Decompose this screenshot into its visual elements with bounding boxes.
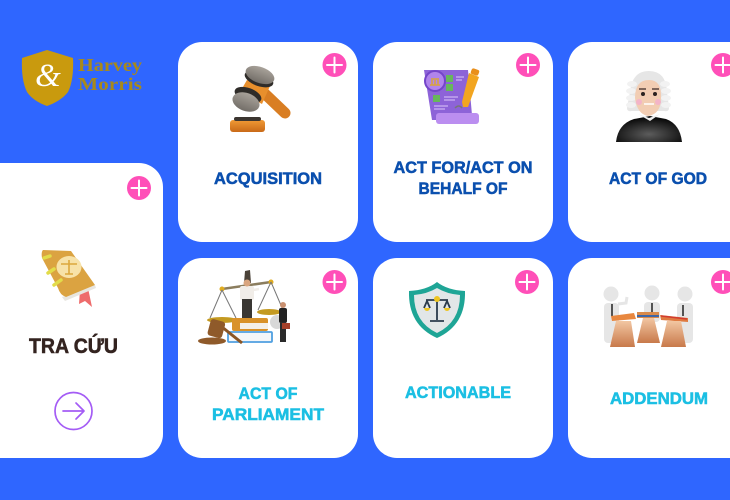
label: actionable: ACTIONABLE: [405, 384, 511, 402]
panel: act of parliament: [178, 258, 358, 458]
panel: addendum: [568, 258, 730, 458]
icon: plus button: [516, 53, 540, 77]
panel: acquisition: [178, 42, 358, 242]
icon: plus button: [515, 270, 539, 294]
logo wordmark: Morris: [78, 74, 142, 94]
label: addendum: ADDENDUM: [610, 390, 708, 408]
panel: act for/act on behalf of: [373, 42, 553, 242]
icon: shield with scales: [409, 282, 465, 338]
label: act of god: ACT OF GOD: [609, 170, 707, 188]
icon: scales, books and figures: [198, 270, 290, 344]
icon: plus button: [322, 270, 346, 294]
icon: gavel: [230, 62, 285, 132]
panel: act of god: [568, 42, 730, 242]
label: acquisition: ACQUISITION: [214, 170, 322, 188]
label: act for/act on behalf of: BEHALF OF: [418, 180, 508, 198]
icon: plus button: [322, 53, 346, 77]
icon: plus button: [127, 176, 151, 200]
icon: debaters at podiums: [604, 286, 693, 347]
label: act of parliament: ACT OF: [238, 385, 298, 403]
icon: shield with ampersand: &: [35, 58, 61, 94]
icon: arrow in circle: [55, 392, 92, 430]
icon: plus button: [711, 270, 730, 294]
icon: plus button: [711, 53, 730, 77]
logo wordmark: Harvey: [78, 55, 142, 75]
label: act for/act on behalf of: ACT FOR/ACT ON: [394, 159, 532, 177]
icon: judge: [616, 71, 682, 142]
heading: tra cứu: TRA CỨU: [29, 334, 118, 358]
logo: Harvey Morris: [22, 50, 142, 106]
panel: tra cứu: [0, 163, 163, 458]
icon: document and pencil: [424, 68, 480, 124]
panel: actionable: [373, 258, 553, 458]
icon: law book: [42, 250, 96, 307]
label: act of parliament: PARLIAMENT: [212, 406, 324, 424]
